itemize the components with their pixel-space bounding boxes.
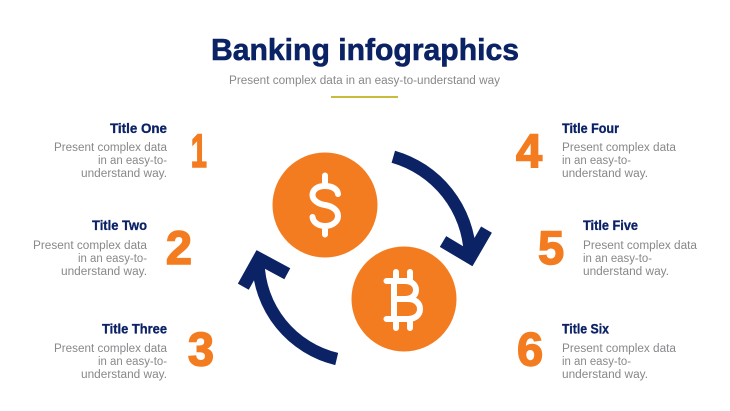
item 6: Title Six (562, 322, 677, 381)
item 4: Title Four: in an easy-to- (562, 155, 631, 167)
arrow: bitcoin to dollar (243, 258, 337, 359)
arrow: dollar to bitcoin (393, 157, 486, 258)
item 5: Title Five: Title Five (583, 218, 638, 233)
item 1: Title One: Title One (110, 121, 167, 136)
item 2: Title Two: Present complex data (33, 240, 148, 252)
item 2: Title Two: in an easy-to- (78, 253, 147, 265)
item 3: Title Three: Title Three (102, 322, 167, 336)
item 6: Title Six: in an easy-to- (562, 356, 631, 368)
icon: dollar coin (272, 152, 378, 258)
item 2: Title Two: understand way. (61, 266, 147, 278)
item 6: Title Six: understand way. (562, 369, 648, 381)
item 3: Title Three: understand way. (81, 369, 167, 381)
item 2: Title Two: Title Two (92, 218, 147, 233)
number 4: 4 (516, 124, 542, 177)
number 3: 3 (188, 322, 214, 376)
item 4: Title Four: understand way. (562, 168, 648, 180)
item 1: Title One: understand way. (81, 168, 167, 180)
item 5: Title Five (583, 218, 698, 278)
item 3: Title Three: Present complex data (54, 343, 168, 355)
item 5: Title Five: in an easy-to- (583, 253, 652, 265)
item 3: Title Three (54, 322, 168, 381)
number 5: 5 (538, 221, 564, 274)
item 6: Title Six: Title Six (562, 322, 609, 336)
item 1: Title One: Present complex data (54, 142, 168, 154)
item 3: Title Three: in an easy-to- (98, 356, 167, 368)
item 4: Title Four: Title Four (562, 121, 620, 136)
icon: bitcoin coin (352, 246, 456, 352)
title: Banking infographics (211, 32, 519, 67)
item 4: Title Four: Present complex data (562, 142, 677, 154)
item 4: Title Four (562, 121, 677, 180)
number 6: 6 (517, 322, 543, 376)
item 5: Title Five: understand way. (583, 266, 669, 278)
item 1: Title One: in an easy-to- (98, 155, 167, 167)
item 5: Title Five: Present complex data (583, 240, 698, 252)
number 2: 2 (166, 221, 192, 274)
item 1: Title One (54, 121, 168, 180)
item 2: Title Two (33, 218, 148, 278)
item 6: Title Six: Present complex data (562, 343, 677, 355)
number 1: 1 (191, 126, 207, 178)
subtitle: Present complex data in an easy-to-understand way (229, 75, 500, 87)
accent underline (331, 96, 398, 98)
